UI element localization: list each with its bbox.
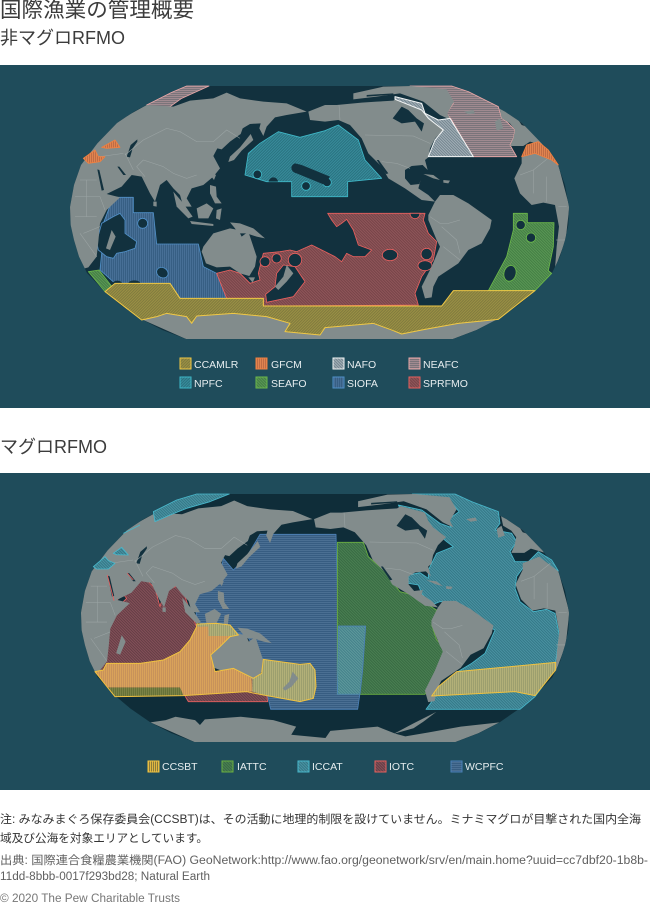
region: SEAFO holes [502,220,536,283]
legend item: SPRFMO: SPRFMO [423,378,468,390]
region: SIOFA holes [97,213,170,283]
region: ICCAT Mediterranean and Arctic [93,494,229,569]
legend item: NEAFC [409,358,459,371]
region: ICCAT [398,494,559,709]
legend item: SIOFA [333,377,378,390]
legend item: ICCAT: ICCAT [312,761,343,773]
legend item: WCPFC: WCPFC [465,761,504,773]
legend: tuna RFMO [148,761,504,773]
region: NPFC holes [253,163,331,190]
map: non-tuna regions [63,86,569,339]
source text: 11dd-8bbb-0017f293bd28; Natural Earth [0,871,210,883]
legend item: CCAMLR: CCAMLR [194,359,239,371]
legend item: CCAMLR [180,358,239,371]
source text: 出典: 国際連合食糧農業機関(FAO) GeoNetwork:http://www.fao.org/geonetwork/srv/en/main.home?uuid=cc7dbf20-1b8b- [0,853,648,867]
region: IATTC and WCPFC overlap [337,626,366,694]
legend item: IATTC [222,761,267,773]
note text [0,812,642,845]
legend item: NPFC: NPFC [194,378,223,390]
panel: non-tuna RFMO map [0,65,650,408]
region: WCPFC [195,534,366,709]
legend item: IOTC: IOTC [389,761,414,773]
source text [0,853,648,883]
note text: 域及び公海を対象エリアとしています。 [0,831,208,845]
region: SPRFMO holes [260,213,432,302]
region: IATTC [337,542,444,694]
legend item: ICCAT [298,761,343,773]
heading: non-tuna RFMO: 非マグロRFMO [0,28,125,48]
legend item: NAFO [333,358,376,371]
legend item: SIOFA: SIOFA [347,378,378,390]
legend item: IATTC: IATTC [237,761,267,773]
region: SPRFMO [217,213,437,306]
land [63,86,569,339]
region: CCSBT fills [95,623,556,702]
panel: tuna RFMO map [0,473,650,790]
legend item: GFCM: GFCM [271,359,302,371]
legend item: NPFC [180,377,223,390]
region: NAFO [395,97,473,157]
legend item: CCSBT: CCSBT [162,761,198,773]
land [74,494,569,742]
region: IOTC inlets [107,573,133,601]
region: GFCM [83,140,558,165]
legend item: NAFO: NAFO [347,359,376,371]
region: IOTC [95,573,268,702]
legend item: GFCM [256,358,302,371]
region: CCSBT outline [95,623,556,702]
legend item: SEAFO: SEAFO [271,378,307,390]
legend item: IOTC [375,761,414,773]
legend item: SEAFO [256,377,307,390]
region: NEAFC [147,86,517,157]
region: SEAFO [88,213,554,292]
legend: non-tuna RFMO [180,358,468,390]
map: tuna regions [74,494,569,742]
legend item: NEAFC: NEAFC [423,359,459,371]
note text: 注: みなみまぐろ保存委員会(CCSBT)は、その活動に地理的制限を設けていません。ミナミマグロが目撃された国内全海 [0,812,642,826]
region: SIOFA [100,197,227,298]
region: NPFC [245,125,382,197]
region: CCAMLR [105,283,535,335]
heading: tuna RFMO: マグロRFMO [0,437,107,457]
